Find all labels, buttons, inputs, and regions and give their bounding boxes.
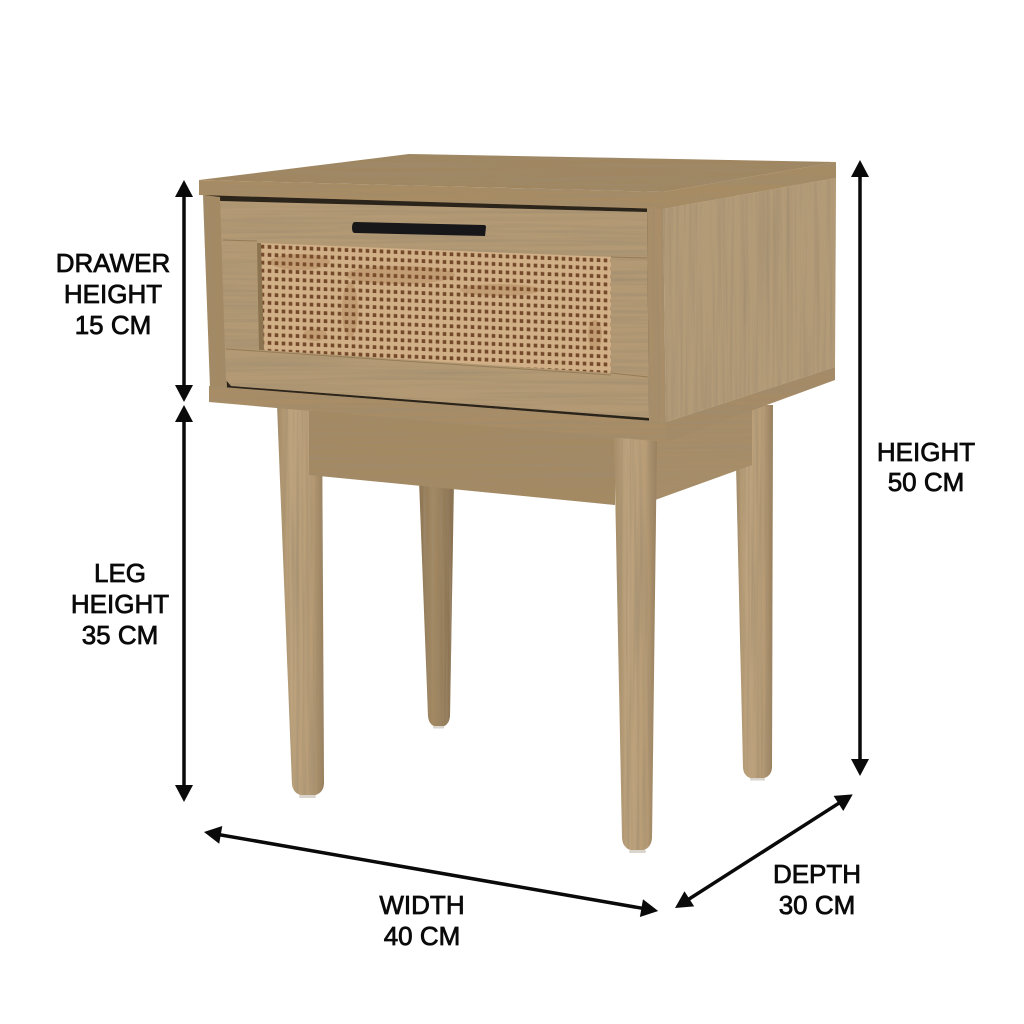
- label: leg height: LEG: [94, 558, 146, 588]
- panel: left front post: [203, 195, 227, 388]
- label: total height: 50 CM: [888, 467, 964, 497]
- label: depth: DEPTH: [773, 859, 861, 889]
- panel: table top surface: [199, 154, 836, 192]
- label: leg height: 35 CM: [82, 620, 158, 650]
- panel: top board front edge: [199, 180, 663, 209]
- panel: cane weave: [260, 243, 611, 373]
- panel: bottom board side edge: [666, 367, 835, 442]
- panel: front right leg: [614, 434, 657, 851]
- panel: drawer frame seams: [223, 240, 648, 377]
- panel: cane discoloration: [270, 254, 602, 350]
- arrow: drawer height: [175, 180, 193, 402]
- panel: bottom board front edge: [209, 386, 666, 442]
- label: width: WIDTH: [379, 890, 465, 920]
- label: drawer height: HEIGHT: [64, 279, 162, 309]
- label: depth: 30 CM: [779, 890, 855, 920]
- panel: drawer front: [220, 201, 649, 418]
- label: leg height: HEIGHT: [71, 589, 169, 619]
- arrow: depth: [670, 787, 858, 916]
- label: drawer height: 15 CM: [75, 310, 151, 340]
- panel: right front post: [647, 207, 666, 424]
- panel: cabinet dark backing: [205, 192, 664, 425]
- label: total height: HEIGHT: [877, 437, 975, 467]
- icon: leg foot pads: [299, 726, 765, 853]
- panel: rattan cane insert: [257, 243, 611, 373]
- panel: back right leg: [735, 405, 773, 779]
- panel: side of cabinet: [663, 178, 836, 422]
- label: width: 40 CM: [384, 921, 460, 951]
- arrow: total height: [851, 160, 869, 776]
- panel: front left leg: [277, 404, 324, 796]
- icon: black drawer handle: [352, 222, 486, 236]
- arrow: width: [202, 823, 660, 920]
- panel: cabinet body: [199, 154, 836, 442]
- arrow: leg height: [175, 405, 193, 802]
- panel: top board side edge: [663, 162, 836, 209]
- panel: back left leg: [419, 480, 454, 727]
- panel: drawer rail shadows: [257, 243, 264, 350]
- label: drawer height: DRAWER: [56, 248, 170, 278]
- panel: side apron rail: [655, 405, 752, 500]
- panel: front apron rail: [309, 405, 615, 505]
